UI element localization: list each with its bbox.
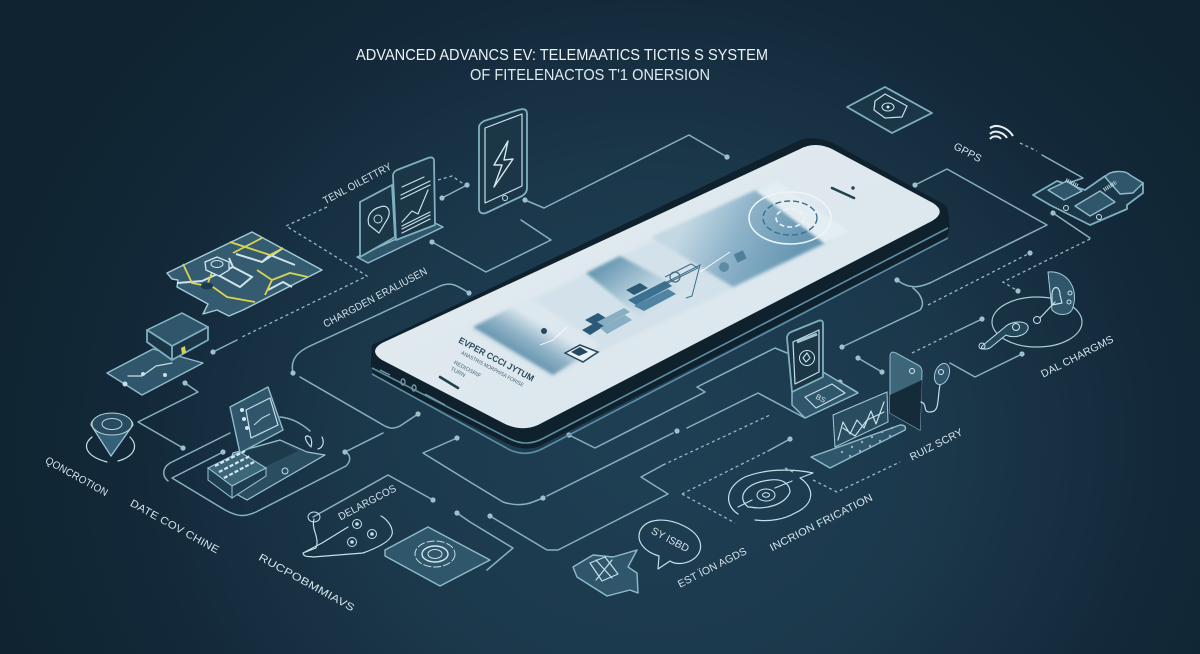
- icon: twin tablets: [357, 157, 443, 263]
- icon: target dial: [729, 470, 813, 521]
- icon: small phone on stand: [787, 320, 858, 418]
- icon: dial connector: [979, 272, 1082, 349]
- icon: plug socket: [921, 361, 952, 412]
- title: [356, 47, 768, 84]
- icon: lightning phone: [479, 109, 527, 213]
- screen heading text: ANASTRIS MORPHISA FORISE: [460, 350, 525, 389]
- phone body: [371, 138, 949, 449]
- screen heading text: REDIOSRIF: [452, 360, 482, 380]
- phone screen: [375, 145, 940, 428]
- screen band middle: [585, 254, 674, 314]
- icon: hardware module: [1033, 171, 1143, 225]
- label: data: DATE COV CHINE: [128, 497, 221, 556]
- icon: speech bubble: SY ISBD: [649, 525, 691, 555]
- screen pale glow: [756, 180, 852, 243]
- icon: terminal device: [208, 387, 325, 500]
- screen data blocks: [540, 250, 747, 362]
- label: charging: CHARGDEN ERALIUSEN: [321, 265, 429, 330]
- screen HUD rings: [749, 192, 831, 244]
- title: OF FITELENACTOS T'1 ONERSION: [470, 67, 710, 84]
- icon: label text tablets: TENL OILETTRY: [321, 161, 394, 207]
- label: gps: GPPS: [951, 141, 984, 165]
- icon: wifi signal: [990, 126, 1013, 139]
- label: diagnostics: DELARGCOS: [336, 483, 399, 523]
- screen heading text: [444, 335, 536, 408]
- connector lines: [138, 135, 1090, 570]
- screen image haze: [474, 242, 730, 363]
- icon: network tile: [847, 87, 932, 133]
- icon: speech bubble: [639, 520, 701, 569]
- title: ADVANCED ADVANCS EV: TELEMAATICS TICTIS S SYSTEM: [356, 47, 768, 64]
- icon: message tile: [573, 550, 638, 596]
- icon: gear tile: [385, 527, 490, 586]
- icon: location pin: [87, 413, 134, 462]
- phone teal edge: [372, 228, 948, 453]
- icon: small phone on stand: BS: [814, 392, 827, 405]
- screen band upper: [651, 190, 825, 287]
- label: resources: RUCPOBMMIAVS: [256, 551, 357, 614]
- icon: roadside unit: [107, 313, 208, 395]
- phone speaker slots: [440, 187, 854, 388]
- label: incident: INCRION FRICATION: [768, 492, 875, 554]
- label: battery: RUIZ SCRY: [908, 426, 965, 463]
- label: location: QONCROTION: [43, 455, 110, 499]
- icon: node bubble: [303, 512, 392, 557]
- icon: vertical panel: [890, 352, 922, 430]
- icon: city map: [167, 232, 322, 316]
- label: estimates: EST ÏON AGDS: [676, 545, 749, 590]
- screen band lower: [473, 298, 600, 375]
- central smartphone: [371, 138, 949, 453]
- screen heading text: TURN: [449, 366, 466, 379]
- phone side buttons: [380, 370, 445, 405]
- label: dial charging: DAL CHARGMS: [1039, 333, 1116, 380]
- screen image: [472, 188, 826, 378]
- icon: chart plate: [811, 392, 905, 468]
- screen heading text: EVPER CCCI JYTUM: [457, 335, 536, 383]
